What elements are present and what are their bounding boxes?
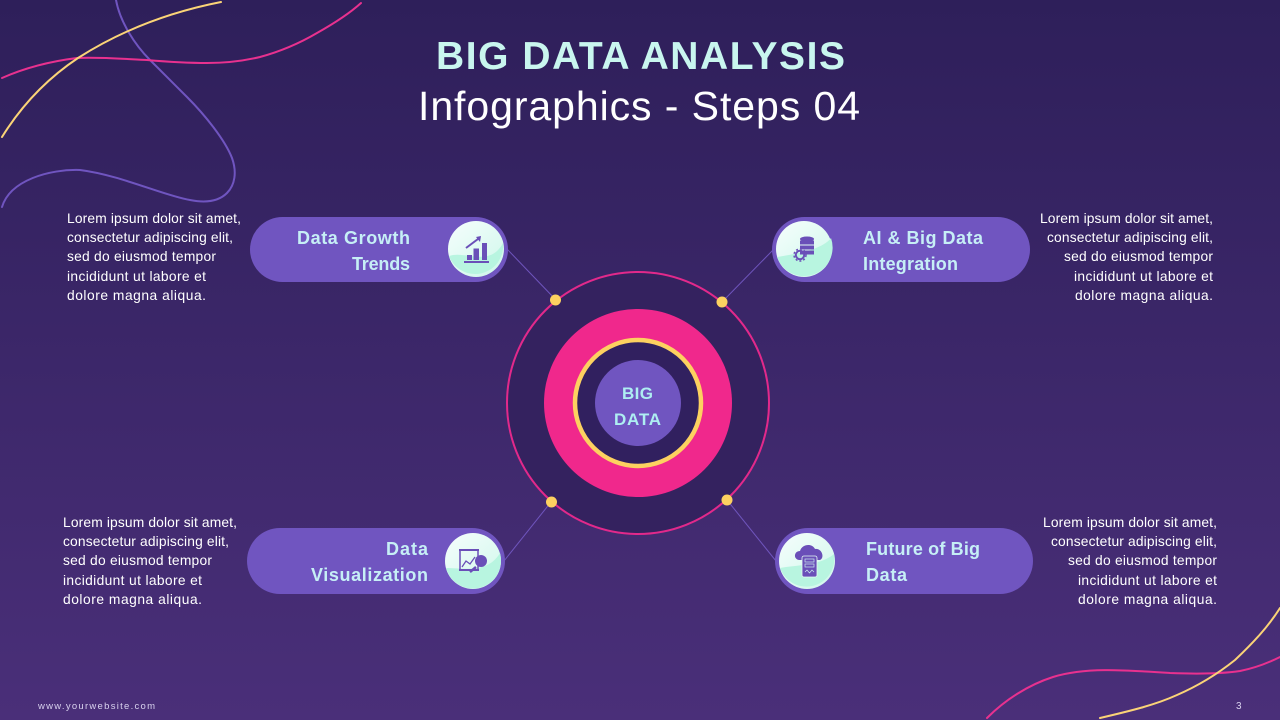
label: Data Growth	[297, 228, 410, 248]
text block: top right: sed do eiusmod tempor	[1064, 249, 1213, 264]
text block: top right: Lorem ipsum dolor sit amet,	[1040, 211, 1213, 226]
icon: cloud server	[795, 545, 822, 577]
icon: bar chart growth	[464, 236, 489, 263]
text block: top left: sed do eiusmod tempor	[67, 249, 216, 264]
panel: future of big data	[775, 528, 1033, 594]
text block: top right: consectetur adipiscing elit,	[1047, 230, 1213, 245]
title line 2: Infographics - Steps 04	[418, 83, 860, 129]
decorative curves: bottom right	[987, 608, 1280, 718]
text block: bottom right: Lorem ipsum dolor sit amet,	[1043, 515, 1217, 530]
label: Integration	[863, 254, 958, 274]
text block: bottom right: sed do eiusmod tempor	[1068, 553, 1217, 568]
label: Future of Big	[866, 539, 980, 559]
centre label: DATA	[614, 410, 661, 429]
icon disc	[445, 533, 501, 589]
panel: ai and big data integration	[772, 217, 1030, 282]
text block: bottom left: Lorem ipsum dolor sit amet,	[63, 515, 237, 530]
centre label	[614, 384, 661, 429]
label: Visualization	[311, 565, 428, 585]
text block: bottom left: dolore magna aliqua.	[63, 592, 202, 607]
text block: bottom left	[63, 515, 237, 607]
label: Data	[866, 565, 908, 585]
pill	[250, 217, 508, 282]
label: AI & Big Data	[863, 228, 984, 248]
centre label: BIG	[622, 384, 653, 403]
text block: bottom right: incididunt ut labore et	[1078, 573, 1217, 588]
text block: top right: dolore magna aliqua.	[1075, 288, 1213, 303]
text block: bottom right: dolore magna aliqua.	[1078, 592, 1217, 607]
text block: top right: incididunt ut labore et	[1074, 269, 1213, 284]
text block: bottom right	[1043, 515, 1217, 607]
yellow ring	[575, 340, 701, 466]
text block: top left: Lorem ipsum dolor sit amet,	[67, 211, 241, 226]
text block: top left	[67, 211, 241, 303]
pill	[247, 528, 505, 594]
text block: top left: dolore magna aliqua.	[67, 288, 206, 303]
text block: bottom left: sed do eiusmod tempor	[63, 553, 212, 568]
label	[297, 228, 410, 274]
connector lines	[504, 249, 776, 561]
title line 1: BIG DATA ANALYSIS	[436, 35, 845, 78]
panel: data visualization	[247, 528, 505, 594]
label	[866, 539, 980, 585]
pill	[772, 217, 1030, 282]
icon disc	[779, 533, 835, 589]
label: Data	[386, 539, 429, 559]
text block: top left: consectetur adipiscing elit,	[67, 230, 233, 245]
icon: chart with magnifier	[459, 549, 487, 572]
icon: database and gear	[794, 236, 814, 261]
icon disc	[776, 221, 833, 277]
footer website: www.yourwebsite.com	[37, 701, 155, 712]
icon disc	[448, 221, 504, 277]
text block: top right	[1040, 211, 1213, 303]
pink ring	[544, 309, 732, 497]
pill	[775, 528, 1033, 594]
text block: bottom right: consectetur adipiscing elit,	[1051, 534, 1217, 549]
title	[418, 35, 860, 129]
text block: top left: incididunt ut labore et	[67, 269, 206, 284]
centre circle	[595, 360, 681, 446]
page number: 3	[1236, 701, 1242, 712]
label	[311, 539, 429, 585]
panel: data growth trends	[250, 217, 508, 282]
label	[863, 228, 984, 274]
decorative curves: top left	[2, 0, 361, 207]
outer ring	[507, 272, 769, 534]
text block: bottom left: consectetur adipiscing elit,	[63, 534, 229, 549]
central diagram	[507, 272, 769, 534]
ring dots	[546, 294, 732, 508]
label: Trends	[352, 254, 410, 274]
text block: bottom left: incididunt ut labore et	[63, 573, 202, 588]
